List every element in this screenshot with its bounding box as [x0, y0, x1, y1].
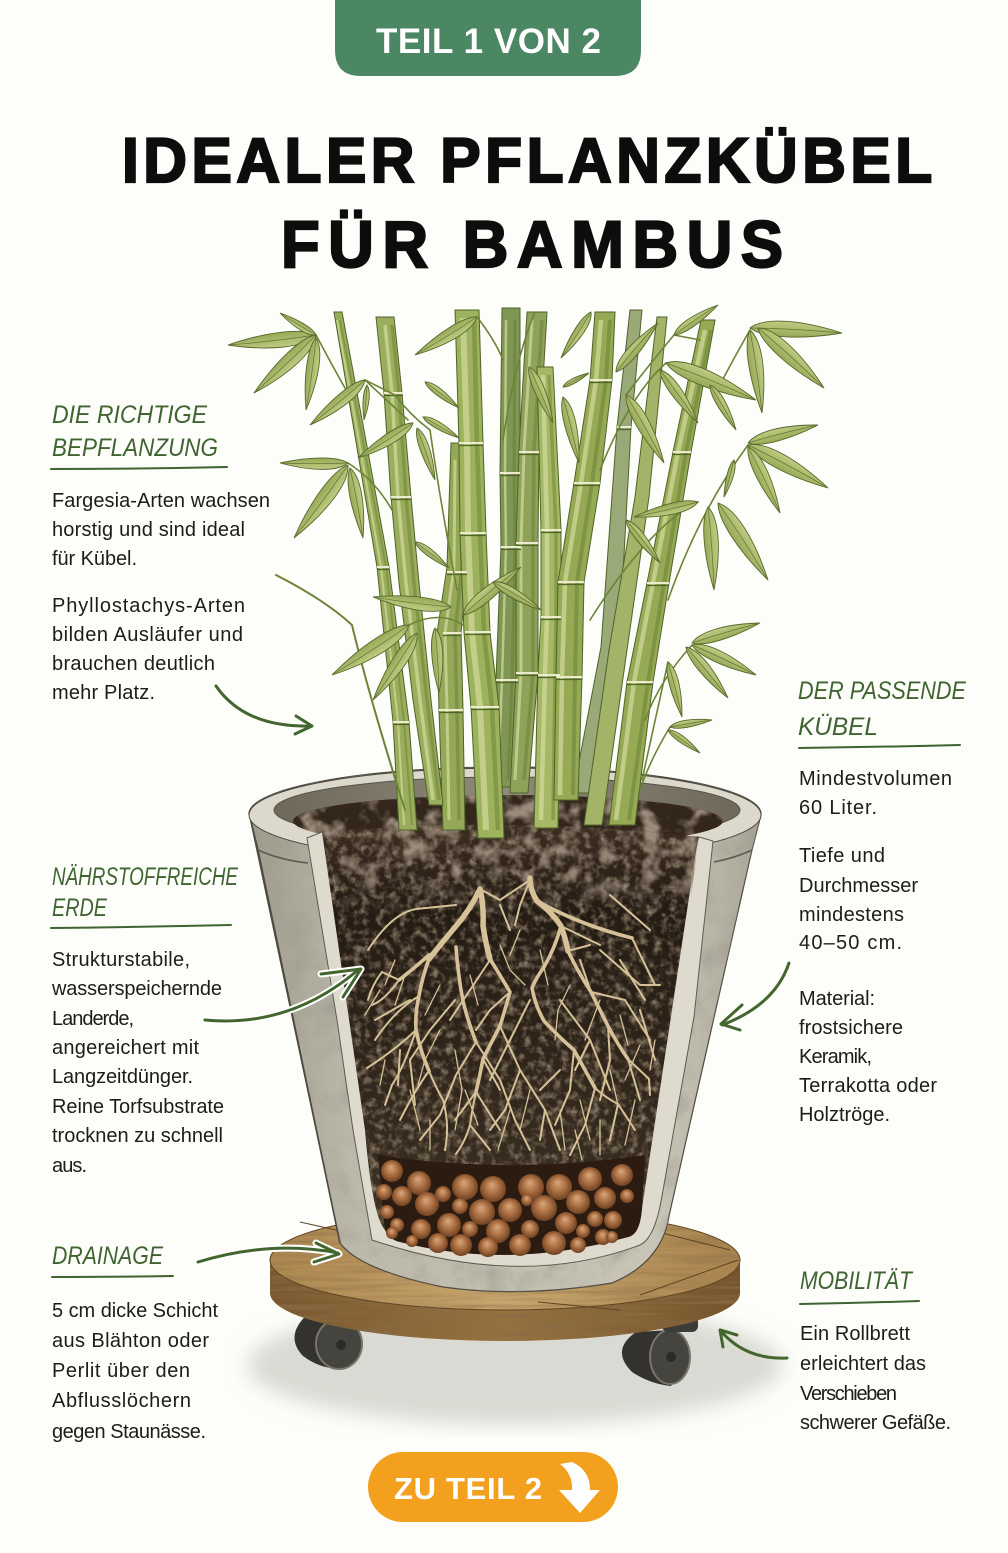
button: zu Teil 2: ZU TEIL 2	[394, 1471, 542, 1506]
text block: Mindestvolumen	[799, 768, 952, 790]
text block: Tiefe und	[799, 845, 885, 867]
text block: Keramik,	[799, 1046, 872, 1068]
heading: ERDE	[52, 894, 107, 922]
text block: 60 Liter.	[799, 797, 877, 819]
text block: bilden Ausläufer und	[52, 624, 243, 646]
arrow: to rolling board	[720, 1330, 787, 1358]
title: FÜR BAMBUS	[281, 207, 783, 281]
text block: gegen Staunässe.	[52, 1421, 206, 1443]
clay pebble drainage layer	[376, 1155, 645, 1257]
text block: aus.	[52, 1155, 87, 1177]
heading	[52, 401, 218, 462]
panel: der passende Kübel	[798, 677, 966, 1126]
culm 9	[573, 310, 642, 793]
culm 3	[455, 310, 504, 838]
pot: rim	[249, 768, 761, 862]
text block: Fargesia-Arten wachsen	[52, 490, 270, 512]
text block	[51, 949, 224, 1177]
text block: erleichtert das	[800, 1353, 926, 1375]
text block: brauchen deutlich	[52, 653, 215, 675]
text block: Holztröge.	[799, 1104, 890, 1126]
culm 11	[609, 320, 715, 825]
panel: nährstoffreiche Erde	[51, 863, 238, 1177]
text block: für Kübel.	[52, 548, 137, 570]
culm 5	[493, 308, 521, 787]
pot: outer wall	[249, 767, 761, 1292]
heading	[52, 863, 238, 922]
heading	[798, 677, 966, 741]
text block: 5 cm dicke Schicht	[52, 1300, 218, 1322]
text block: Landerde,	[52, 1008, 134, 1030]
text block	[52, 1300, 218, 1443]
text block: Abflusslöchern	[52, 1390, 191, 1412]
culm 7	[534, 367, 561, 828]
culm 2	[376, 317, 443, 805]
culm 6	[510, 312, 547, 793]
title	[122, 126, 932, 281]
text block: schwerer Gefäße.	[800, 1412, 951, 1434]
text block: 40–50 cm.	[799, 932, 902, 954]
text block: trocknen zu schnell	[52, 1125, 223, 1147]
illustration: potted bamboo on trolley	[227, 301, 842, 1425]
text block: Strukturstabile,	[52, 949, 190, 971]
panel: Drainage	[52, 1242, 218, 1443]
heading: KÜBEL	[798, 713, 878, 741]
roots	[365, 878, 660, 1160]
header badge: Teil 1 von 2: TEIL 1 VON 2	[376, 22, 601, 61]
icon: curved down arrow	[559, 1462, 600, 1513]
text block: Perlit über den	[52, 1360, 190, 1382]
pot: cut face	[307, 832, 713, 1266]
soil	[322, 825, 699, 1255]
text block: horstig und sind ideal	[52, 519, 245, 541]
title: IDEALER PFLANZKÜBEL	[122, 126, 932, 196]
heading: DIE RICHTIGE	[52, 401, 207, 429]
arrow: to bamboo planting	[216, 686, 312, 734]
heading: NÄHRSTOFFREICHE	[52, 863, 238, 891]
culm 4	[437, 443, 467, 830]
header badge: Teil 1 von 2	[335, 0, 641, 76]
arrow: to soil	[205, 969, 361, 1021]
text block: Reine Torfsubstrate	[52, 1096, 224, 1118]
culm 10	[584, 317, 667, 825]
icon: trolley wheels	[294, 1312, 698, 1386]
bamboo leaves	[227, 301, 842, 755]
text block: Verschieben	[800, 1383, 897, 1405]
arrow: to drainage	[198, 1243, 339, 1262]
bamboo branches	[276, 312, 750, 810]
text block: mindestens	[799, 904, 904, 926]
heading: MOBILITÄT	[800, 1267, 913, 1295]
text block: Terrakotta oder	[799, 1075, 937, 1097]
button: zu Teil 2	[368, 1452, 618, 1522]
text block	[52, 490, 270, 704]
heading: DRAINAGE	[52, 1242, 163, 1270]
text block: Phyllostachys-Arten	[52, 595, 245, 617]
text block: Material:	[799, 988, 875, 1010]
text block: Ein Rollbrett	[800, 1323, 910, 1345]
text block: Durchmesser	[799, 875, 918, 897]
text block: mehr Platz.	[52, 682, 155, 704]
arrow: to pot wall	[721, 963, 789, 1030]
panel: die richtige Bepflanzung	[51, 401, 270, 704]
rolling board	[270, 1210, 740, 1341]
text block: aus Blähton oder	[52, 1330, 209, 1352]
text block: wasserspeichernde	[51, 978, 222, 1000]
floor shadow	[247, 1305, 783, 1425]
text block	[799, 768, 952, 1126]
culm 1	[334, 312, 417, 830]
culm 8	[554, 312, 615, 800]
bamboo nodes	[377, 380, 691, 724]
text block	[800, 1323, 951, 1434]
text block: angereichert mit	[52, 1037, 199, 1059]
bamboo culms	[334, 308, 715, 838]
heading: DER PASSENDE	[798, 677, 966, 705]
heading: BEPFLANZUNG	[52, 434, 218, 462]
panel: Mobilität	[800, 1267, 951, 1434]
text block: frostsichere	[799, 1017, 903, 1039]
text block: Langzeitdünger.	[52, 1066, 193, 1088]
